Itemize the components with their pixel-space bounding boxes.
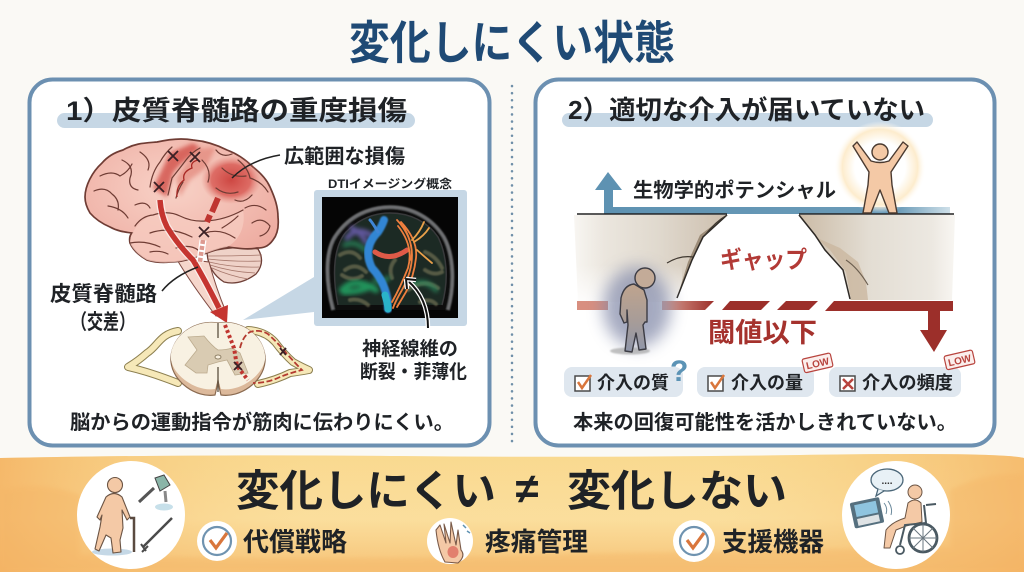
banner heading: ≠ xyxy=(515,465,539,512)
cliff: left xyxy=(572,215,727,303)
cord xyxy=(171,323,265,389)
cerebrum xyxy=(85,139,278,262)
label: gap: ギャップ xyxy=(720,247,807,274)
chip: amount: LOW xyxy=(805,356,831,372)
threshold dashed line xyxy=(577,301,953,311)
banner: bottom xyxy=(0,454,1024,572)
chip: quality: 介入の質 xyxy=(597,373,669,393)
icon circle: walking with cane and tools xyxy=(77,461,185,569)
chip: frequency: 介入の頻度 xyxy=(862,373,953,393)
banner heading: 変化しない xyxy=(567,468,787,516)
illustration: spinal cord cross-section xyxy=(128,323,309,395)
label: nerve fiber damage xyxy=(360,338,467,383)
label: assistive devices: 支援機器 xyxy=(722,527,824,557)
figure: person with raised arms xyxy=(834,121,926,213)
label: biological potential: 生物学的ポテンシャル xyxy=(633,179,836,202)
label: nerve fiber damage: 神経線維の xyxy=(362,338,458,360)
heading: panel 2: 2）適切な介入が届いていない xyxy=(568,95,925,125)
grey matter xyxy=(185,336,248,375)
label: nerve fiber damage: 断裂・菲薄化 xyxy=(360,361,467,383)
label: extensive damage: 広範囲な損傷 xyxy=(284,145,405,168)
banner heading xyxy=(236,465,787,516)
central canal xyxy=(215,355,221,359)
center dotted divider xyxy=(511,86,513,446)
label: extensive damage xyxy=(232,145,405,178)
temporal lobe fill xyxy=(130,210,244,262)
heading underline: panel 2 xyxy=(562,113,933,127)
tract: intact xyxy=(160,200,219,308)
head ring xyxy=(327,207,453,310)
check: assistive devices xyxy=(673,520,715,562)
median fissure xyxy=(217,323,219,392)
panel 2 summary: 本来の回復可能性を活かしきれていない。 xyxy=(573,411,957,434)
chip: amount xyxy=(697,353,833,397)
label: pain management: 疼痛管理 xyxy=(485,527,588,557)
lesions xyxy=(153,143,261,204)
damaged tract in nerve xyxy=(240,331,302,383)
figure: slumped person xyxy=(603,267,671,354)
icon: hand xyxy=(427,518,473,564)
label: below threshold: 閾値以下 xyxy=(708,318,817,348)
cord rim xyxy=(171,323,265,395)
chip: frequency xyxy=(829,350,975,397)
DTI heading: DTIイメージング概念 xyxy=(328,176,452,191)
panel: intervention not reached xyxy=(536,80,994,446)
brainstem xyxy=(176,258,226,316)
label: corticospinal tract xyxy=(50,267,198,334)
chip: quality xyxy=(564,355,688,397)
heading: panel 1: 1）皮質脊髄路の重度損傷 xyxy=(66,96,407,126)
nerve roots xyxy=(128,330,309,384)
panel: corticospinal tract damage xyxy=(30,80,490,446)
cortical folds xyxy=(94,147,270,254)
threshold down arrow xyxy=(920,311,947,352)
damaged vessels xyxy=(177,160,198,197)
icon circle: wheelchair and communication device: .... xyxy=(881,476,893,487)
DTI image xyxy=(314,190,467,326)
damage markers xyxy=(154,151,286,370)
callout wedge to DTI xyxy=(243,277,314,320)
cerebellum xyxy=(207,248,262,283)
heading underline: panel 1 xyxy=(57,113,415,128)
check: compensation xyxy=(197,521,237,561)
tract arrow head xyxy=(210,305,228,323)
panel 1 summary: 脳からの運動指令が筋肉に伝わりにくい。 xyxy=(70,410,454,434)
illustration: brain xyxy=(85,139,278,323)
cliff: right xyxy=(799,215,955,300)
potential line and arrow xyxy=(577,172,954,214)
damaged tract in cord xyxy=(225,325,248,380)
tract: broken xyxy=(207,198,218,222)
label: corticospinal tract: （交差） xyxy=(71,311,135,334)
icon circle: wheelchair and communication device xyxy=(842,461,950,569)
chip: quality: ? xyxy=(670,355,688,388)
banner heading: 変化しにくい xyxy=(236,468,496,516)
colored fibers xyxy=(340,220,442,309)
label: compensation: 代償戦略 xyxy=(243,527,347,557)
chip: amount: 介入の量 xyxy=(731,373,803,393)
label: corticospinal tract: 皮質脊髄路 xyxy=(50,283,157,306)
title: 変化しにくい状態 xyxy=(349,17,675,69)
chip: frequency: LOW xyxy=(947,353,973,369)
arrow to thinned fibers xyxy=(406,279,428,328)
